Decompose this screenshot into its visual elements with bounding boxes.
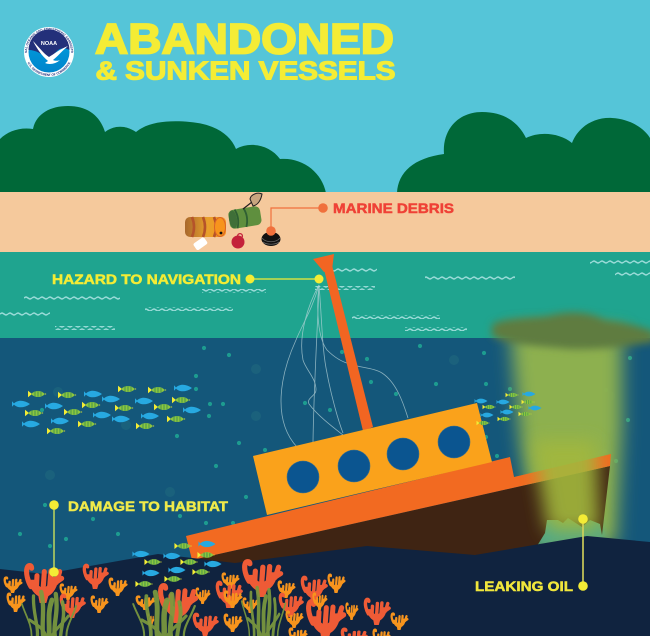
fish school: left: [12, 385, 201, 434]
debris: red buoy: [232, 234, 244, 248]
bubbles: [45, 355, 615, 497]
debris: hand net: [243, 193, 262, 209]
trees: left shoreline: [0, 106, 326, 193]
callout: damage to habitat: [49, 498, 228, 577]
hull: dark lower body: [192, 466, 610, 570]
callout: marine debris: MARINE DEBRIS: [333, 200, 454, 216]
callout: damage to habitat: DAMAGE TO HABITAT: [68, 498, 228, 514]
deep water: [0, 338, 650, 636]
coral reef: red: [27, 561, 389, 636]
title: ABANDONED: [95, 16, 394, 64]
icon: NOAA logo: U.S. DEPARTMENT OF COMMERCE: [28, 62, 70, 76]
shallow water: [0, 252, 650, 338]
icon: NOAA logo: [24, 27, 74, 77]
callout: leaking oil: [475, 514, 588, 594]
fish school: near reef: [132, 541, 222, 587]
seagrass clusters: [22, 588, 285, 636]
mast with flag: [313, 254, 373, 431]
background: sky: [0, 0, 650, 193]
title: [95, 16, 396, 86]
cabin: [253, 403, 492, 515]
coral reef: orange: [5, 573, 407, 636]
debris: green drum: [228, 206, 262, 229]
debris: tire: [262, 232, 280, 246]
seabed: [0, 536, 650, 636]
callout: leaking oil: LEAKING OIL: [475, 578, 573, 594]
hull: orange deck: [186, 454, 611, 560]
title: & SUNKEN VESSELS: [96, 56, 396, 86]
oil slick on surface: [492, 313, 650, 349]
callout: hazard to navigation: HAZARD TO NAVIGATION: [52, 271, 241, 287]
beach: [0, 192, 650, 252]
water particles: [18, 344, 632, 548]
icon: NOAA logo: NOAA: [41, 41, 57, 47]
shipwreck hull: [186, 403, 611, 570]
trees: right shoreline: [397, 112, 650, 193]
oil plume: underwater: [510, 330, 622, 550]
coral reef: orange foreground: [225, 592, 326, 628]
callout: marine debris: [266, 200, 454, 236]
marine debris: [185, 193, 280, 251]
debris: orange drum: [185, 217, 226, 237]
portholes: [287, 426, 470, 493]
callout: hazard to navigation: [52, 271, 324, 287]
surface waves: [0, 260, 650, 331]
oil glow under wreck: [535, 515, 606, 545]
rope netting: [281, 285, 408, 447]
oil overlay on wreck: [532, 440, 600, 532]
fish school: right: [475, 392, 541, 425]
debris: white bottle: [193, 237, 208, 251]
